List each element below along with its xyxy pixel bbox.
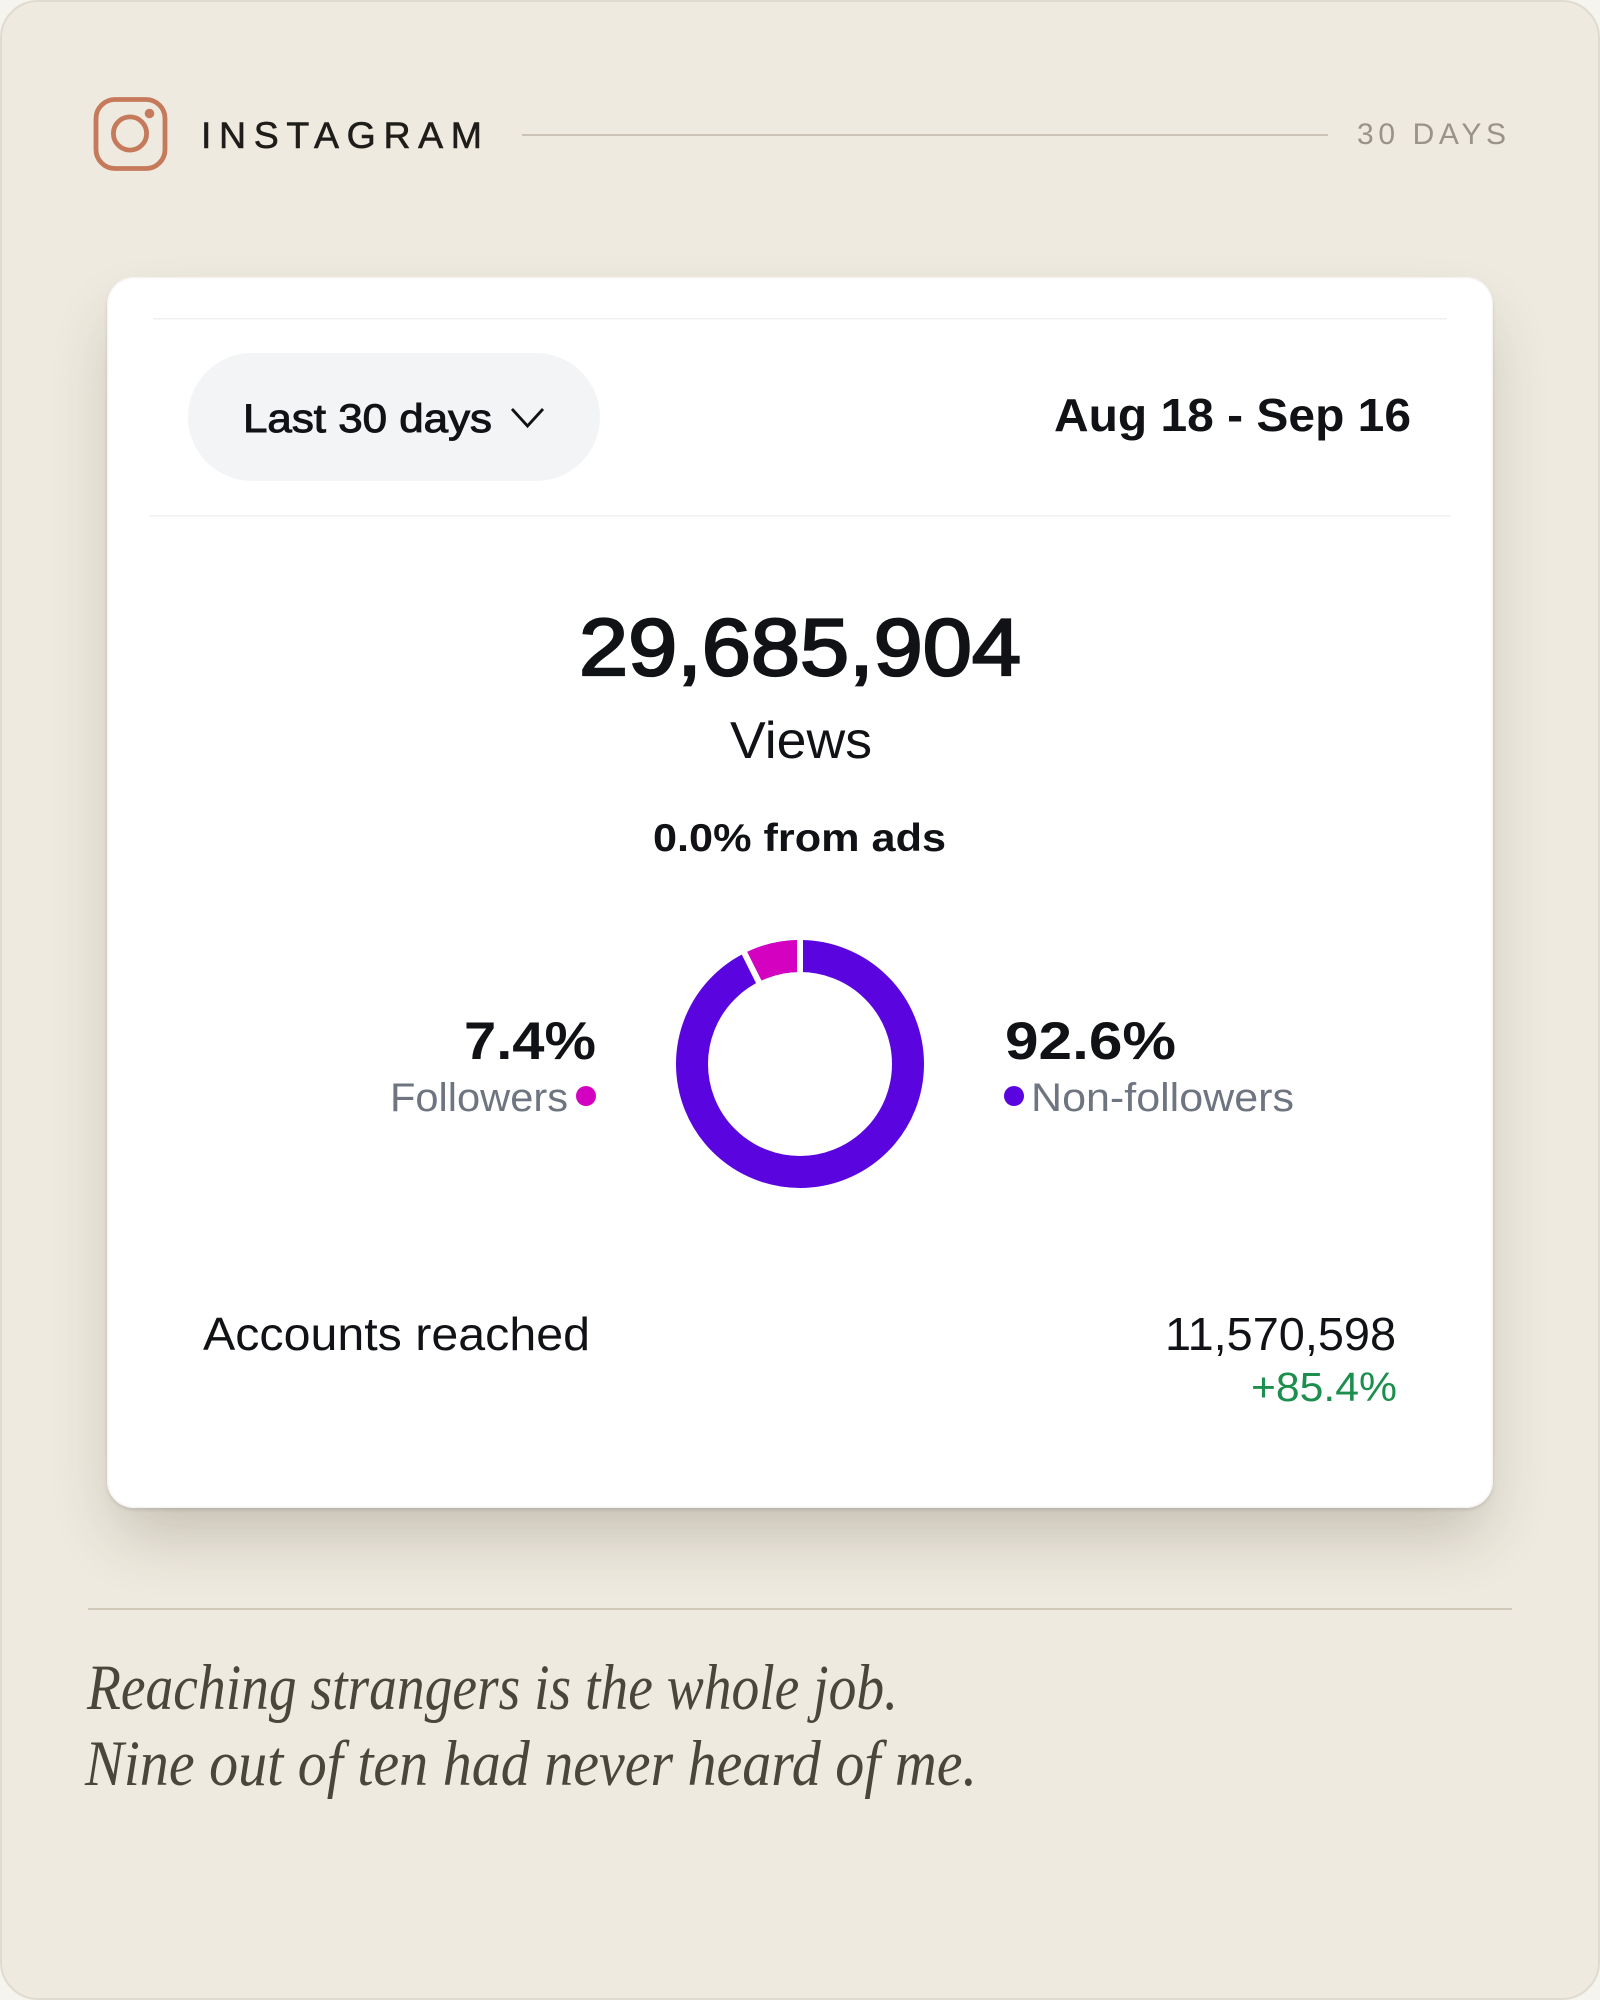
accounts reached change: +85.4% xyxy=(1251,1364,1397,1410)
stat: non-followers xyxy=(1004,1012,1294,1120)
heading: Instagram: INSTAGRAM xyxy=(201,114,482,156)
caption: Reaching strangers is the whole job. xyxy=(86,1652,898,1724)
period label: 30 days: 30 DAYS xyxy=(1357,118,1506,151)
icon: Instagram logo xyxy=(96,100,165,168)
stat: non-followers: Non-followers xyxy=(1031,1076,1294,1120)
caption: Nine out of ten had never heard of me. xyxy=(84,1728,977,1800)
donut chart: followers vs non-followers xyxy=(692,936,908,1172)
accounts reached label: Accounts reached xyxy=(203,1308,590,1360)
ads share: 0.0% from ads xyxy=(653,817,946,860)
date range: Aug 18 - Sep 16 xyxy=(1054,389,1411,441)
total views number: 29,685,904 xyxy=(579,603,1021,693)
panel: analytics card xyxy=(107,277,1493,1508)
stat: non-followers: 92.6% xyxy=(1005,1012,1176,1071)
icon: chevron down xyxy=(512,409,543,426)
date range filter pill xyxy=(188,353,600,481)
header: Instagram brand row xyxy=(96,100,1506,168)
stat: followers: Followers xyxy=(390,1076,568,1120)
views label: Views xyxy=(730,712,872,770)
caption xyxy=(84,1652,977,1800)
filter label: Last 30 days xyxy=(243,397,492,441)
stat: followers: 7.4% xyxy=(464,1012,596,1071)
accounts reached value: 11,570,598 xyxy=(1165,1308,1396,1360)
stat: followers xyxy=(390,1012,596,1120)
